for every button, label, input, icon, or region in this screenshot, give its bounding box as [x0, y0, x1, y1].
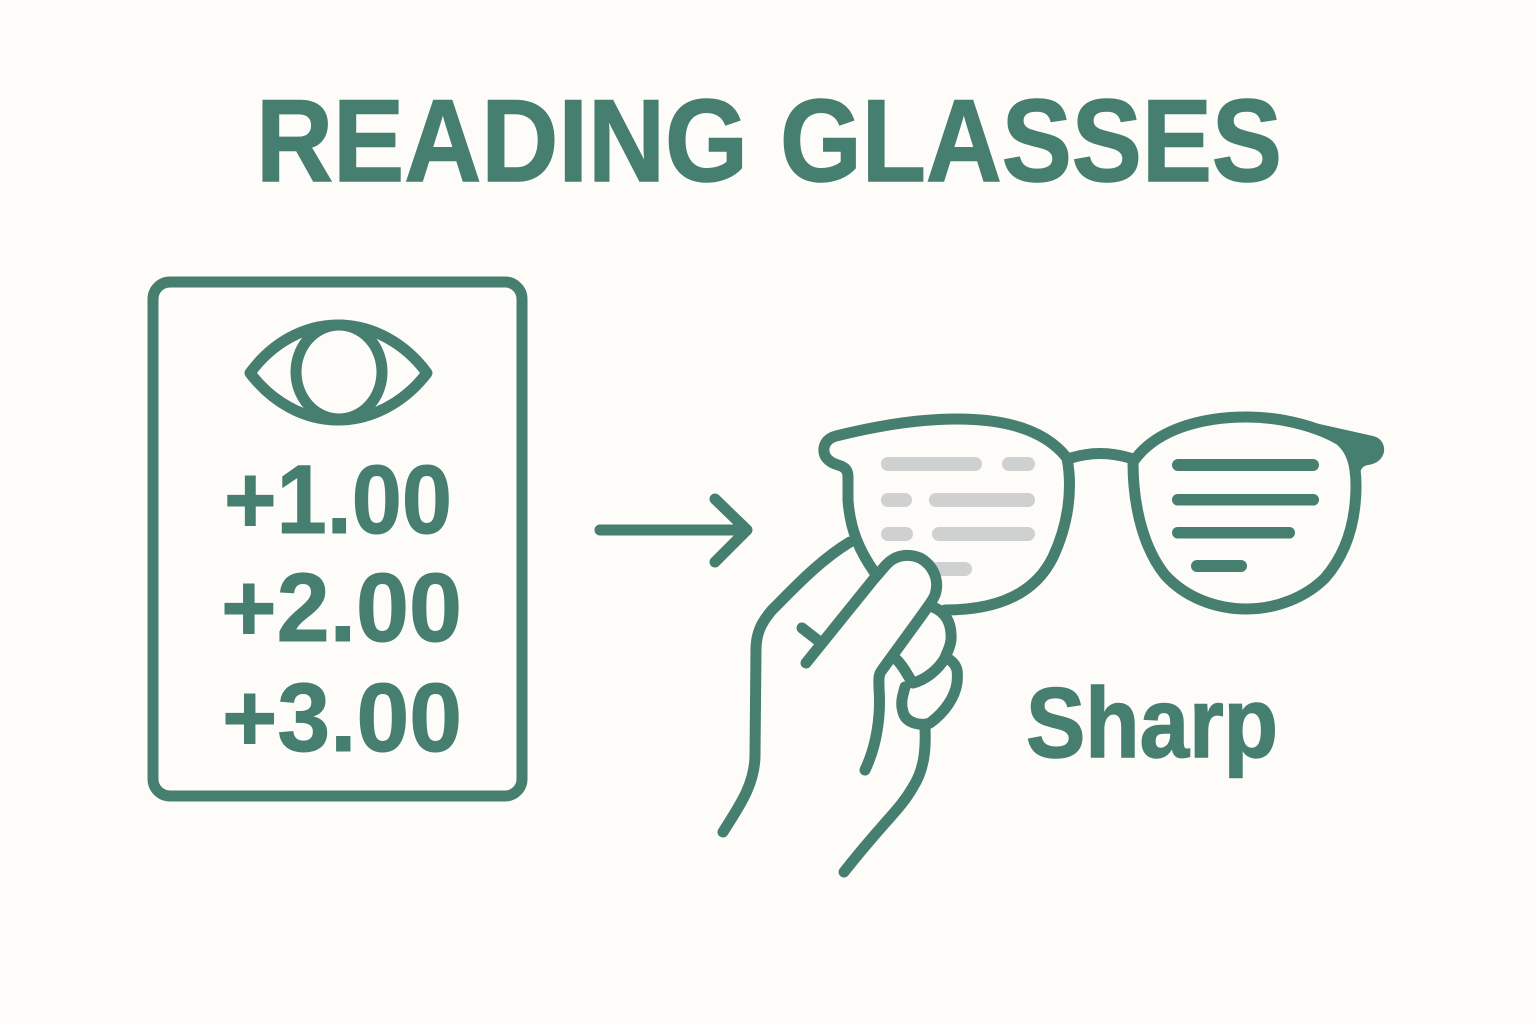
label: Sharp: Sharp — [1026, 667, 1278, 778]
bridge — [1071, 454, 1130, 458]
hand — [723, 542, 957, 872]
temple end — [1306, 421, 1384, 476]
strength: +1.00: +1.00 — [224, 445, 452, 554]
title: GLASSES — [780, 75, 1282, 206]
title: READING — [256, 75, 748, 206]
sharp text lines — [1172, 459, 1319, 572]
arrow — [600, 499, 747, 562]
icon: eye — [250, 325, 427, 420]
right lens with sharp text — [1133, 417, 1384, 609]
blurred text lines — [881, 457, 1035, 576]
panel: lens strengths card — [153, 282, 522, 796]
strength: +3.00: +3.00 — [222, 663, 462, 772]
illustration: glasses held in hand — [723, 417, 1384, 872]
strength: +2.00: +2.00 — [221, 553, 462, 662]
left lens with blurred text — [824, 419, 1069, 610]
